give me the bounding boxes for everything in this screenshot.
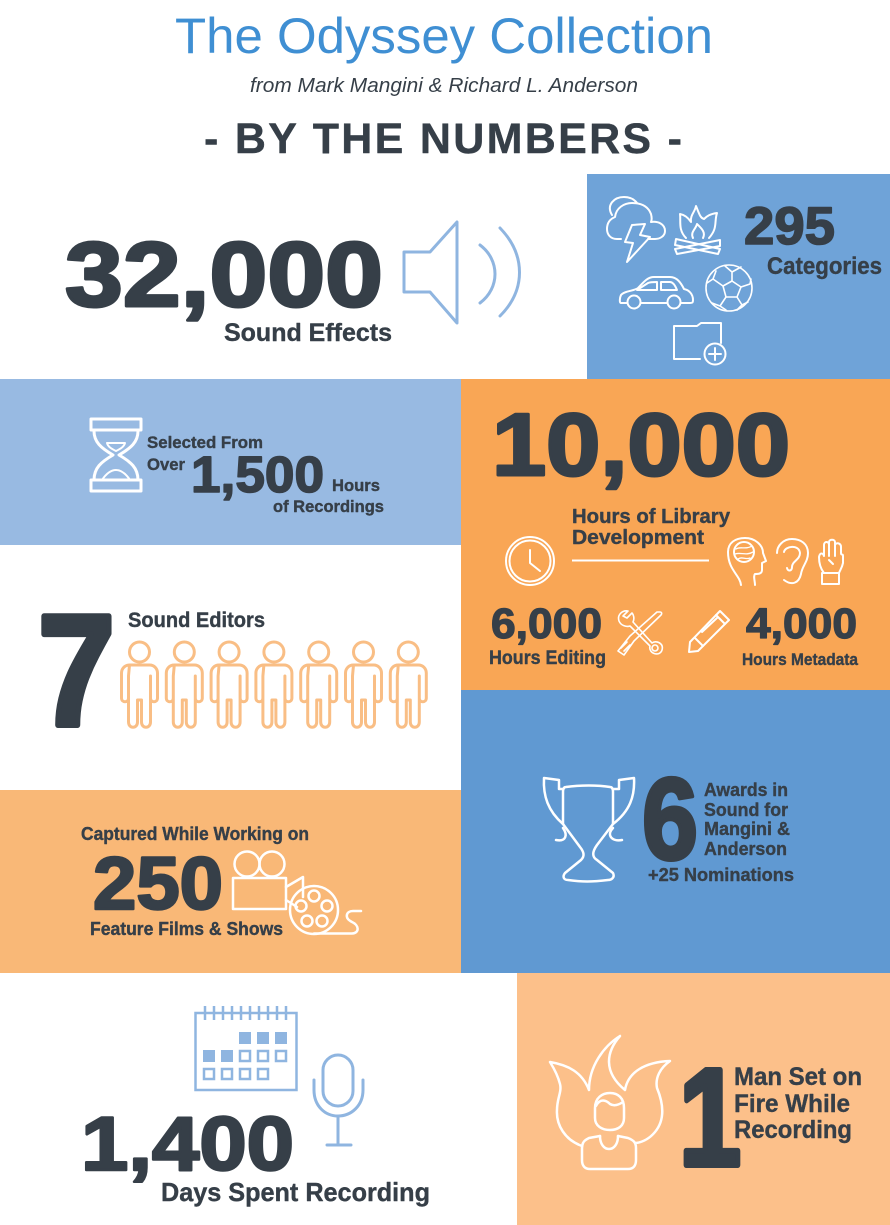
heading block [175,8,713,163]
label: captured while working on: Captured While Working on [81,824,309,844]
icon: seven people [122,642,426,727]
icon: hourglass [91,419,141,491]
label: hours of library development [572,506,731,549]
stat: 295: 295 [744,197,835,256]
label: awards [704,780,790,859]
label: selected from over: Selected From [147,433,263,452]
icon: clock [506,537,554,585]
label: feature films and shows: Feature Films & Shows [90,919,283,939]
label: man set on fire while recording: Man Set on [734,1063,862,1091]
panel: days recording [81,1006,430,1207]
icon: pencil [689,611,729,652]
panel: hours of recordings [0,379,461,545]
icon: microphone [314,1055,363,1145]
label: sound editors: Sound Editors [128,609,265,632]
icon: hand [819,540,843,584]
panel: sound effects [65,222,520,347]
label: hours of library development: Hours of Library [572,506,731,528]
icon: soccer ball [706,265,752,311]
icon: calendar [196,1006,296,1090]
label: hours editing: Hours Editing [489,648,606,669]
label: hours metadata: Hours Metadata [742,650,858,669]
icon: man in flames [550,1036,670,1169]
label: hours of library development: Development [572,527,704,549]
panel: library development [461,379,890,690]
label: selected from over: Over [147,455,185,474]
panel: man on fire [517,973,890,1225]
stat: 1,400: 1,400 [81,1102,294,1187]
icon: car [620,277,693,308]
label: man set on fire while recording: Recording [734,1116,852,1144]
stat: 6: 6 [642,754,698,884]
stat: 1: 1 [679,1041,741,1195]
stat: 4,000: 4,000 [746,600,857,648]
label: nominations: +25 Nominations [648,865,794,885]
icon: ear [777,539,808,583]
icon: speaker [404,222,520,323]
stat: 7: 7 [38,583,115,759]
label: selected from over [147,433,263,474]
label: hours of recordings: of Recordings [273,497,384,516]
stat: 1,500: 1,500 [191,446,324,503]
label: categories: Categories [767,253,882,280]
label: sound effects: Sound Effects [224,319,392,347]
label: hours of recordings [273,476,384,516]
panel: feature films [0,790,461,973]
label: man set on fire while recording [734,1063,862,1144]
stat: 6,000: 6,000 [491,600,602,648]
stat: 32,000: 32,000 [65,224,383,326]
label: days spent recording: Days Spent Recording [161,1177,430,1207]
panel: awards [461,690,890,973]
icon: head with brain [728,538,766,585]
panel: sound editors [38,583,426,759]
title: The Odyssey Collection [175,8,713,64]
icon: trophy [544,778,634,882]
icon: film camera and reel [233,852,361,934]
panel: categories [587,174,890,379]
label: man set on fire while recording: Fire While [734,1090,850,1118]
label: awards: Awards in [704,780,788,800]
stat: 250: 250 [93,842,223,925]
label: awards: Anderson [704,839,787,859]
label: awards: Mangini & [704,819,790,839]
icon: storm cloud [607,197,665,262]
section heading: - BY THE NUMBERS - [204,115,682,163]
stat: 10,000: 10,000 [492,395,790,494]
icon: tools [618,611,662,655]
label: hours of recordings: Hours [332,476,380,495]
label: awards: Sound for [704,800,788,820]
icon: campfire [675,206,720,254]
subtitle: from Mark Mangini & Richard L. Anderson [250,75,638,97]
icon: add folder [674,323,726,364]
